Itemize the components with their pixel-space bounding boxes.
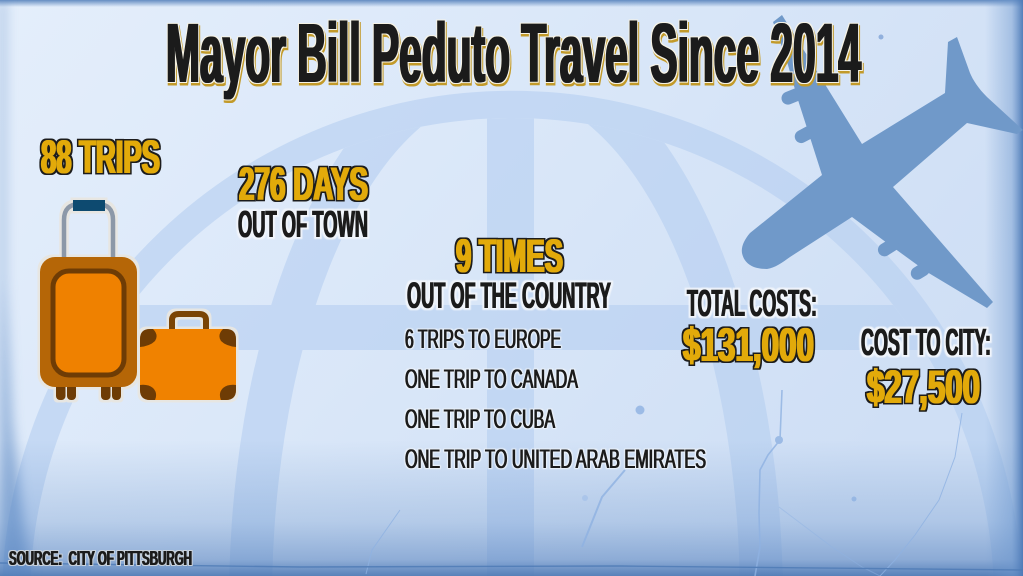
stat: 88 trips: 88 TRIPS — [41, 130, 160, 183]
source note: SOURCE: CITY OF PITTSBURGH — [9, 548, 192, 570]
list of foreign trips: ONE TRIP TO UNITED ARAB EMIRATES — [405, 444, 706, 474]
icon: rolling suitcase — [40, 200, 137, 400]
text: TOTAL COSTS: — [687, 283, 817, 325]
stat: 9 times: 9 TIMES — [456, 229, 563, 282]
stat: 276 days: 276 DAYS — [239, 157, 368, 210]
stat: $131,000: $131,000 — [683, 318, 814, 371]
text: OUT OF TOWN — [238, 204, 368, 246]
list of foreign trips — [405, 324, 706, 474]
list of foreign trips: ONE TRIP TO CUBA — [405, 404, 555, 434]
list of foreign trips: ONE TRIP TO CANADA — [405, 364, 578, 394]
text: OUT OF THE COUNTRY — [407, 275, 611, 316]
icon: airplane silhouette — [742, 15, 1023, 308]
list of foreign trips: 6 TRIPS TO EUROPE — [405, 324, 561, 354]
icon: small briefcase — [140, 314, 236, 400]
